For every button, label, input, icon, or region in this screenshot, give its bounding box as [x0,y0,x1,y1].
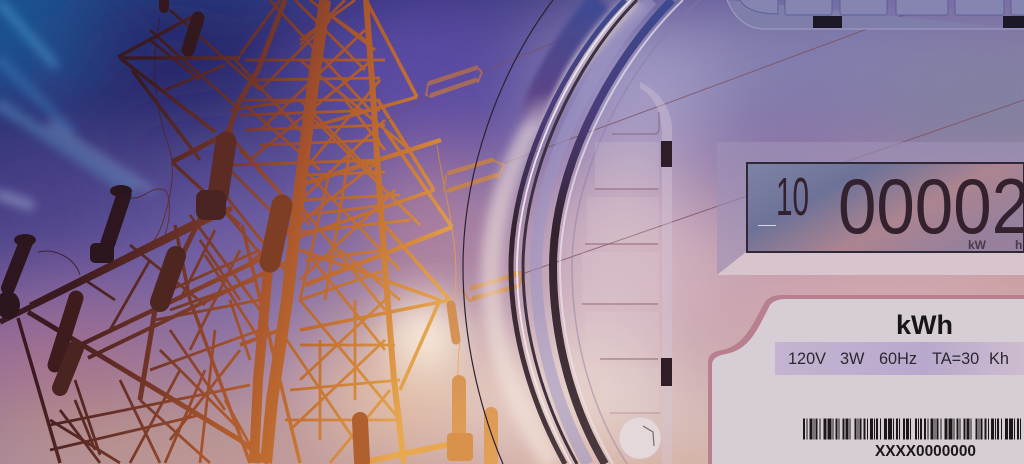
ratings strip: 120V [788,350,826,368]
screw [619,417,661,459]
meter glass outline [463,0,553,464]
unit heading: kWh [896,310,953,340]
LCD screen [747,163,1024,252]
insulator mid left column [218,142,226,195]
barcode [803,418,1024,440]
LCD small reading: 10 [776,167,809,227]
insulator left 3 [55,298,76,365]
ratings strip [775,342,1024,375]
meter inner panel column [582,82,672,464]
insulator left 1 [8,242,26,288]
meter ring bands [491,0,700,464]
power wires across meter [388,0,1024,274]
ratings strip: 3W [840,350,865,368]
insulator base block [447,433,473,461]
slot dividers [582,112,660,413]
tower crossarms [0,0,470,463]
insulator top stub [159,1,169,8]
ratings strip: TA=30 [932,350,979,368]
insulator lower small [60,348,76,388]
meter slots [582,142,659,412]
ratings strip: 60Hz [879,350,917,368]
power tower silhouette [0,0,470,463]
LCD units: kW [968,238,987,252]
insulator top [188,18,198,50]
black latch top [661,141,672,167]
rating plate [708,295,1024,464]
insulator mid column [270,205,282,262]
tower lattice bracing [50,0,420,463]
insulators on crossarms [8,1,282,388]
right side orange insulators [360,66,522,461]
insulator left 2 [108,195,124,243]
serial number: XXXX0000000 [875,443,976,460]
tower wires [38,18,465,440]
ratings strip: Kh [989,350,1009,368]
display bezel: h [1015,238,1022,252]
insulator caps [0,185,226,319]
black latch bottom [661,358,672,386]
top housing with tiles and clips [727,0,1024,29]
insulator lower column [160,256,176,302]
display bezel [717,142,1024,275]
tower main legs [140,0,404,463]
sky light streaks [0,3,150,205]
